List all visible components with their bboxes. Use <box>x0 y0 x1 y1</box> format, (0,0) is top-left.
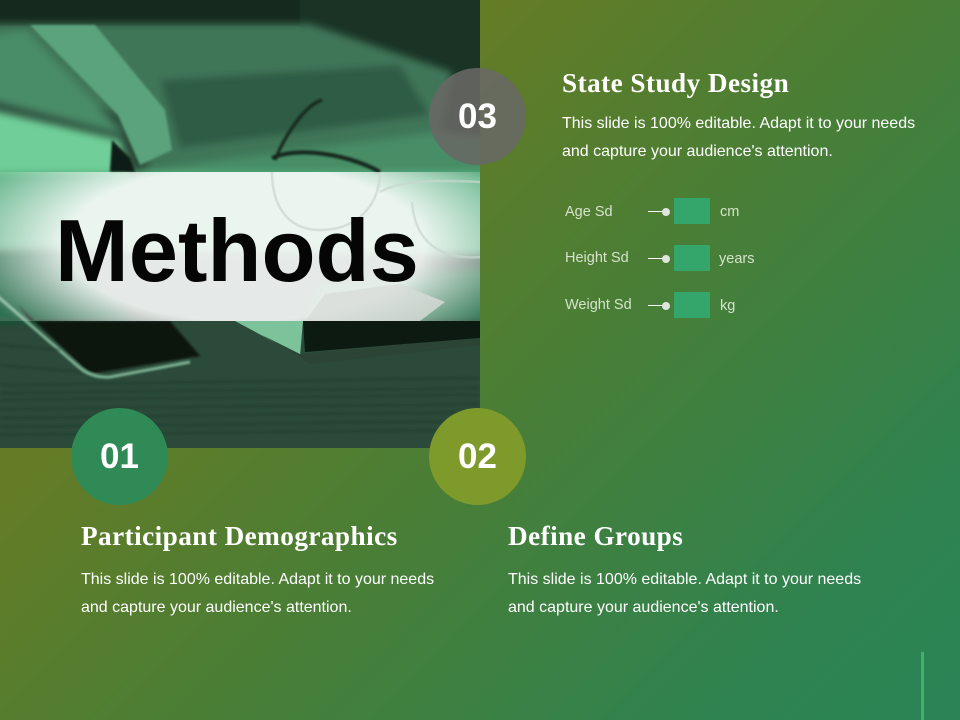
row: Weight Sd <box>565 292 735 318</box>
row: Weight Sd: Weight Sd <box>565 297 632 313</box>
text: State Study Design description: This slide is 100% editable. Adapt it to your needs <box>562 115 915 132</box>
number badge 03: 03 <box>458 97 497 136</box>
book cover below band <box>235 321 303 356</box>
text: Participant Demographics description <box>81 571 434 616</box>
photo: open books, glasses and phone <box>0 0 480 448</box>
row: Height Sd: Height Sd <box>565 250 629 266</box>
heading: Participant Demographics: Participant Demographics <box>81 521 398 551</box>
heading: Define Groups: Define Groups <box>508 521 683 551</box>
number badge 01 <box>71 408 168 505</box>
text: Participant Demographics description: and capture your audience's attention. <box>81 599 352 616</box>
glasses through band <box>270 172 480 321</box>
text: State Study Design description: and capture your audience's attention. <box>562 143 833 160</box>
phone <box>0 294 200 377</box>
text: State Study Design description <box>562 115 915 160</box>
row: Height Sd: years <box>719 251 754 267</box>
glasses <box>272 100 380 172</box>
wood <box>0 345 480 435</box>
row: Age Sd <box>565 198 739 224</box>
row: Height Sd <box>565 245 754 271</box>
title: Methods: Methods <box>55 201 419 300</box>
text: Define Groups description: and capture your audience's attention. <box>508 599 779 616</box>
number badge 03 <box>429 68 526 165</box>
title band <box>0 172 480 321</box>
text: Participant Demographics description: This slide is 100% editable. Adapt it to your needs <box>81 571 434 588</box>
number badge 02 <box>429 408 526 505</box>
text: Define Groups description: This slide is 100% editable. Adapt it to your needs <box>508 571 861 588</box>
heading: State Study Design: State Study Design <box>562 68 789 98</box>
accent line <box>921 652 924 720</box>
number badge 02: 02 <box>458 437 497 476</box>
number badge 01: 01 <box>100 437 139 476</box>
text: Define Groups description <box>508 571 861 616</box>
row: Age Sd: cm <box>720 204 739 220</box>
row: Age Sd: Age Sd <box>565 204 613 220</box>
row: Weight Sd: kg <box>720 298 735 314</box>
